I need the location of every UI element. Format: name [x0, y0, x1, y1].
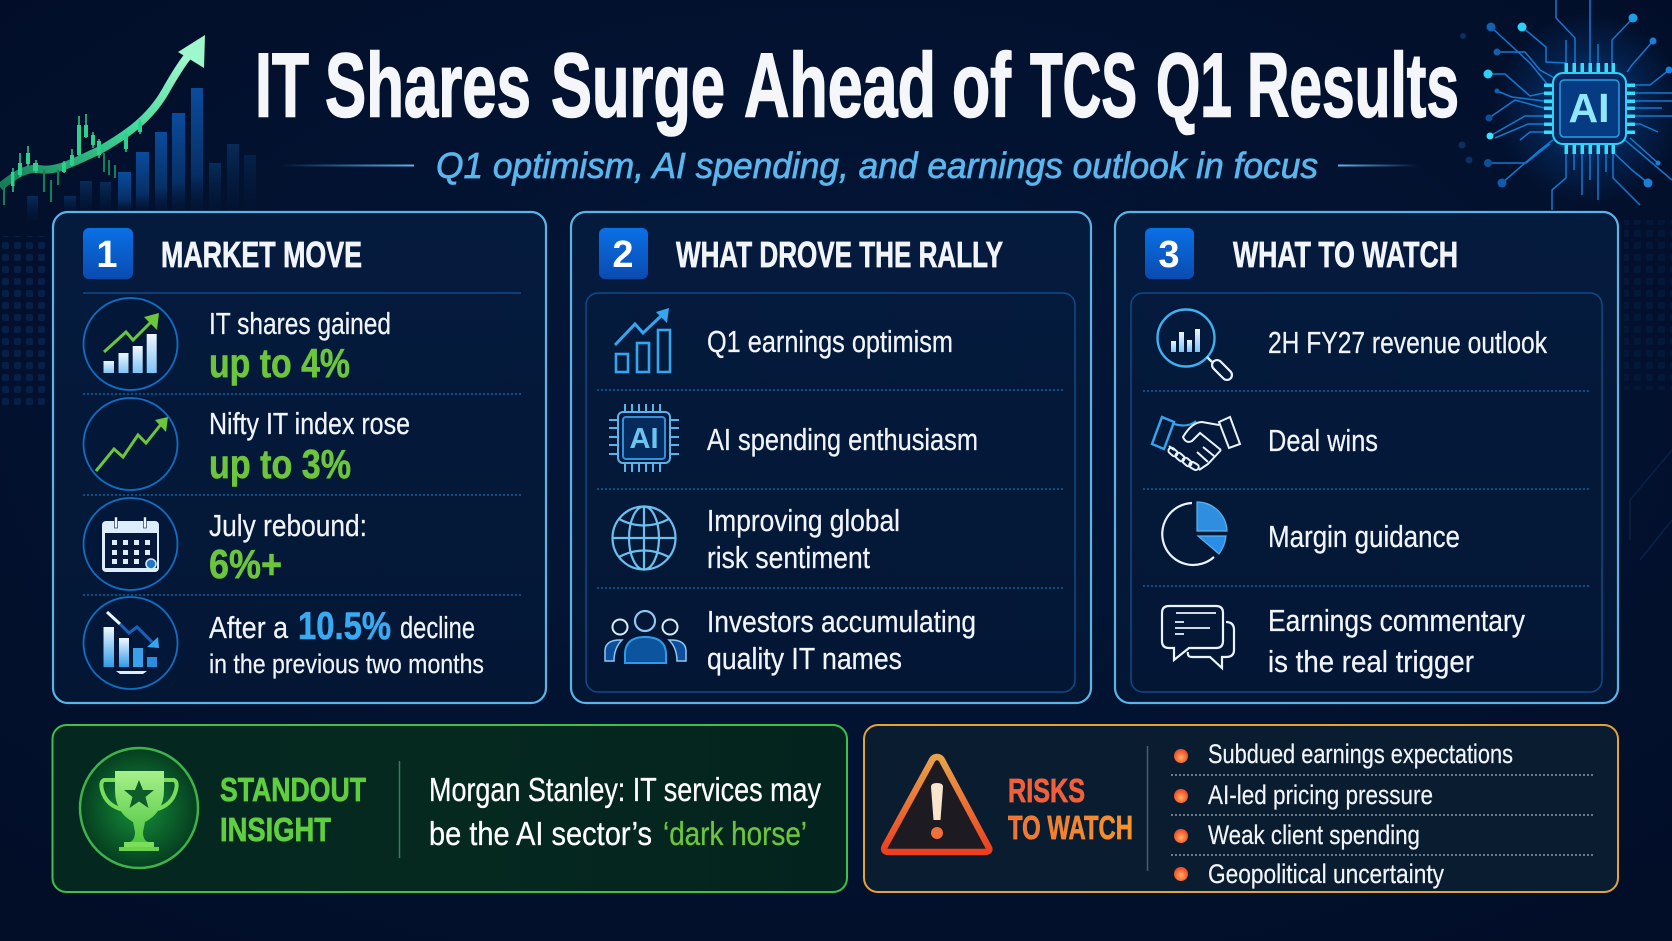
label: standout insight: STANDOUT [220, 771, 366, 808]
section number badge: 2 [612, 234, 634, 276]
text: Nifty IT index [209, 406, 410, 487]
subtitle: Q1 optimism, AI spending, and earnings outlook in focus [436, 145, 1318, 186]
title: IT [255, 36, 309, 136]
heading: WHAT TO WATCH [1233, 234, 1458, 275]
icon: magnifier with bars [1158, 310, 1234, 382]
text: morgan stanley quote: Morgan Stanley: IT services may [429, 771, 821, 808]
text: revenue outlook: 2H FY27 revenue outlook [1268, 325, 1547, 360]
text: IT shares gained [209, 306, 391, 386]
text: Nifty IT index: Nifty IT index rose [209, 406, 410, 441]
icon: trophy medal [80, 748, 198, 868]
heading: MARKET MOVE [161, 234, 362, 275]
text: global risk sentiment: risk sentiment [707, 540, 870, 575]
title: Surge [551, 36, 725, 136]
text: earnings commentary: is the real trigger [1268, 644, 1474, 679]
icon: warning triangle [884, 757, 989, 852]
growth chart illustration [0, 35, 256, 220]
text: July rebound [209, 508, 367, 587]
title: of [952, 36, 1011, 136]
icon: AI chip [609, 404, 679, 472]
text: decline [209, 605, 484, 679]
section number badge: 3 [1158, 234, 1180, 276]
text: IT shares gained: up to 4% [209, 340, 350, 386]
text: investors accumulating: quality IT names [707, 641, 902, 676]
section number badge [599, 228, 648, 279]
label: risks to watch: TO WATCH [1008, 809, 1133, 846]
panel: risks to watch [864, 725, 1618, 892]
panel frame [1115, 212, 1618, 703]
panel: what to watch [1115, 212, 1618, 703]
text: earnings commentary: Earnings commentary [1268, 603, 1525, 638]
icon: pie chart [1162, 502, 1227, 565]
text: Nifty IT index: up to 3% [209, 441, 351, 487]
text: global risk sentiment: Improving global [707, 503, 900, 538]
icon: bar chart with arrow [615, 308, 670, 372]
text: investors accumulating [707, 604, 976, 676]
text: deal wins: Deal wins [1268, 423, 1378, 458]
label: risks to watch [1008, 772, 1133, 846]
panel frame [53, 212, 546, 703]
icon: globe [612, 506, 676, 570]
icon: investors group [605, 611, 686, 663]
label: standout insight: INSIGHT [220, 811, 331, 848]
panel frame [52, 725, 847, 892]
text: July rebound: July rebound: [209, 508, 367, 543]
label: risks to watch: RISKS [1008, 772, 1085, 809]
icon: trend line [84, 398, 178, 490]
text: decline: 10.5% [298, 605, 391, 648]
icon: calendar [84, 498, 178, 590]
text: July rebound: 6%+ [209, 541, 282, 587]
icon: AI chip circuit: AI [1568, 85, 1610, 131]
icon: rising bars [84, 298, 178, 390]
section number badge [1145, 228, 1194, 279]
text: morgan stanley quote [429, 771, 821, 852]
text: global risk sentiment [707, 503, 900, 575]
panel: standout insight [52, 725, 847, 892]
panel: market move [53, 212, 546, 703]
risk list: Weak client spending [1208, 820, 1420, 850]
text: decline: After a [209, 610, 289, 645]
title: Q1 [1156, 36, 1232, 136]
panel frame [864, 725, 1618, 892]
text: AI spending: AI spending enthusiasm [707, 422, 978, 457]
title [255, 36, 1459, 136]
icon: handshake [1152, 417, 1240, 471]
text: morgan stanley quote: ‘dark horse’ [663, 815, 807, 852]
panel: what drove the rally [571, 212, 1091, 703]
text: IT shares gained: IT shares gained [209, 306, 391, 341]
risk list: AI-led pricing pressure [1208, 780, 1433, 810]
title: Ahead [744, 36, 936, 136]
text: earnings commentary [1268, 603, 1525, 679]
icon: AI chip circuit [1458, 0, 1672, 210]
text: investors accumulating: Investors accumulating [707, 604, 976, 639]
title: Results [1247, 36, 1459, 136]
icon: chat bubbles [1162, 606, 1234, 668]
text: morgan stanley quote: be the AI sector’s [429, 815, 652, 852]
text: decline: in the previous two months [209, 649, 484, 679]
risk list: Subdued earnings expectations [1208, 739, 1513, 769]
text: decline: decline [400, 610, 475, 645]
heading: WHAT DROVE THE RALLY [676, 234, 1003, 275]
panel frame [571, 212, 1091, 703]
section number badge: 1 [96, 234, 118, 276]
label: standout insight [220, 771, 366, 848]
title: Shares [325, 36, 531, 136]
section number badge [83, 228, 133, 279]
risk list: Geopolitical uncertainty [1208, 859, 1444, 889]
title: TCS [1030, 36, 1137, 136]
icon: AI chip: AI [630, 423, 658, 455]
icon: falling bars [84, 597, 178, 689]
risk list [1174, 739, 1513, 889]
text: margin guidance: Margin guidance [1268, 519, 1460, 554]
text: Q1 earnings: Q1 earnings optimism [707, 324, 953, 359]
